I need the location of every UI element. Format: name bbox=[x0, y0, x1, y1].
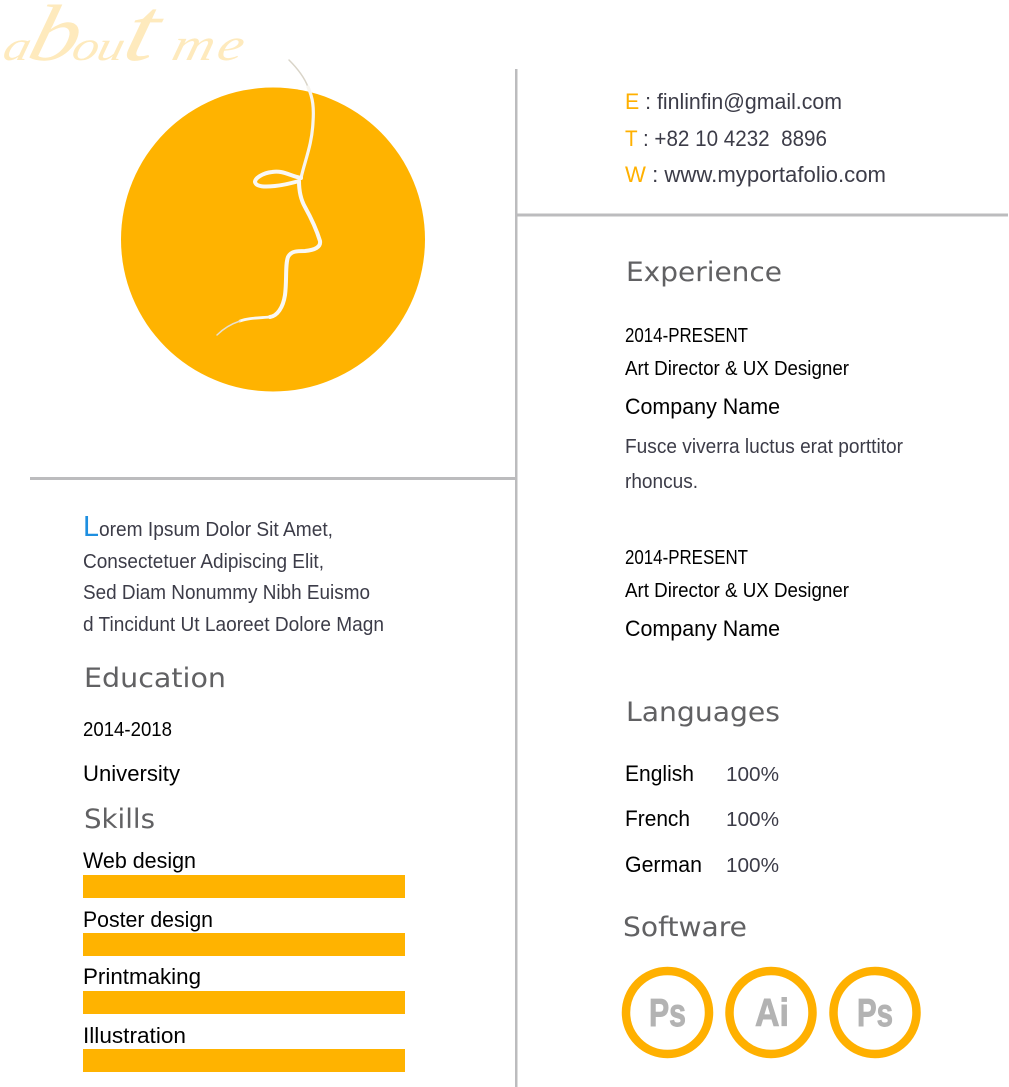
panel: education bbox=[83, 663, 226, 786]
script title: about me: me bbox=[167, 20, 251, 70]
panel: languages bbox=[625, 697, 780, 877]
experience entry two: Company Name bbox=[625, 616, 780, 641]
icon: Photoshop badge: Ps bbox=[649, 992, 686, 1035]
language: French: French bbox=[625, 806, 690, 831]
website: W : www.myportafolio.com bbox=[625, 162, 886, 187]
skill bar: illustration: Illustration bbox=[83, 1023, 186, 1048]
intro paragraph: Consectetuer Adipiscing Elit, bbox=[83, 551, 324, 573]
panel: skills bbox=[83, 804, 405, 1072]
language: English: 100% bbox=[726, 764, 779, 786]
contact details bbox=[625, 89, 886, 187]
icon: Photoshop badge bbox=[834, 971, 916, 1054]
panel: education: University bbox=[83, 761, 180, 786]
portrait: orange circle with line-art face bbox=[121, 60, 425, 392]
skill bar: web design bbox=[83, 848, 405, 898]
panel: software bbox=[623, 912, 916, 1054]
language: French bbox=[625, 806, 779, 831]
experience entry one: 2014-PRESENT bbox=[625, 325, 748, 347]
language: French: 100% bbox=[726, 809, 779, 831]
icon: Illustrator badge bbox=[730, 971, 812, 1054]
skill bar: poster design: Poster design bbox=[83, 907, 213, 932]
heading: Skills: Skills bbox=[84, 804, 155, 835]
skill bar: web design: Web design bbox=[83, 848, 196, 873]
telephone: T : +82 10 4232 8896 bbox=[625, 126, 827, 151]
intro paragraph bbox=[83, 511, 384, 636]
experience entry two bbox=[625, 547, 849, 641]
icon: face profile line bbox=[217, 60, 320, 335]
skill bar: illustration bbox=[83, 1023, 405, 1072]
experience entry one: Art Director & UX Designer bbox=[625, 358, 849, 380]
intro paragraph: L bbox=[83, 511, 99, 543]
skill bar: poster design bbox=[83, 907, 405, 956]
panel: education: 2014-2018 bbox=[83, 719, 172, 741]
icon: Photoshop badge: Ps bbox=[857, 992, 893, 1035]
icon: Photoshop badge bbox=[626, 971, 709, 1054]
language: English bbox=[625, 761, 779, 786]
panel: experience bbox=[625, 257, 903, 641]
skill bar: printmaking: Printmaking bbox=[83, 964, 201, 989]
experience entry one: rhoncus. bbox=[625, 471, 698, 493]
language: German: 100% bbox=[726, 855, 779, 877]
experience entry one: Fusce viverra luctus erat porttitor bbox=[625, 436, 903, 458]
experience entry one bbox=[625, 325, 903, 493]
icon: Illustrator badge: Ai bbox=[755, 992, 789, 1035]
language: German bbox=[625, 852, 779, 877]
heading: Languages: Languages bbox=[626, 697, 780, 728]
heading: Software: Software bbox=[623, 912, 747, 943]
intro paragraph: Sed Diam Nonummy Nibh Euismo bbox=[83, 582, 370, 604]
email: E : finlinfin@gmail.com bbox=[625, 89, 842, 114]
language: English: English bbox=[625, 761, 694, 786]
skill bar: printmaking bbox=[83, 964, 405, 1014]
experience entry two: 2014-PRESENT bbox=[625, 547, 748, 569]
heading: Education: Education bbox=[84, 663, 226, 694]
intro paragraph: orem Ipsum Dolor Sit Amet, bbox=[99, 519, 333, 541]
experience entry one: Company Name bbox=[625, 394, 780, 419]
intro paragraph: d Tincidunt Ut Laoreet Dolore Magn bbox=[83, 614, 384, 636]
heading: Experience: Experience bbox=[626, 257, 782, 288]
language: German: German bbox=[625, 852, 702, 877]
experience entry two: Art Director & UX Designer bbox=[625, 580, 849, 602]
script title: about me: ou bbox=[68, 23, 130, 70]
